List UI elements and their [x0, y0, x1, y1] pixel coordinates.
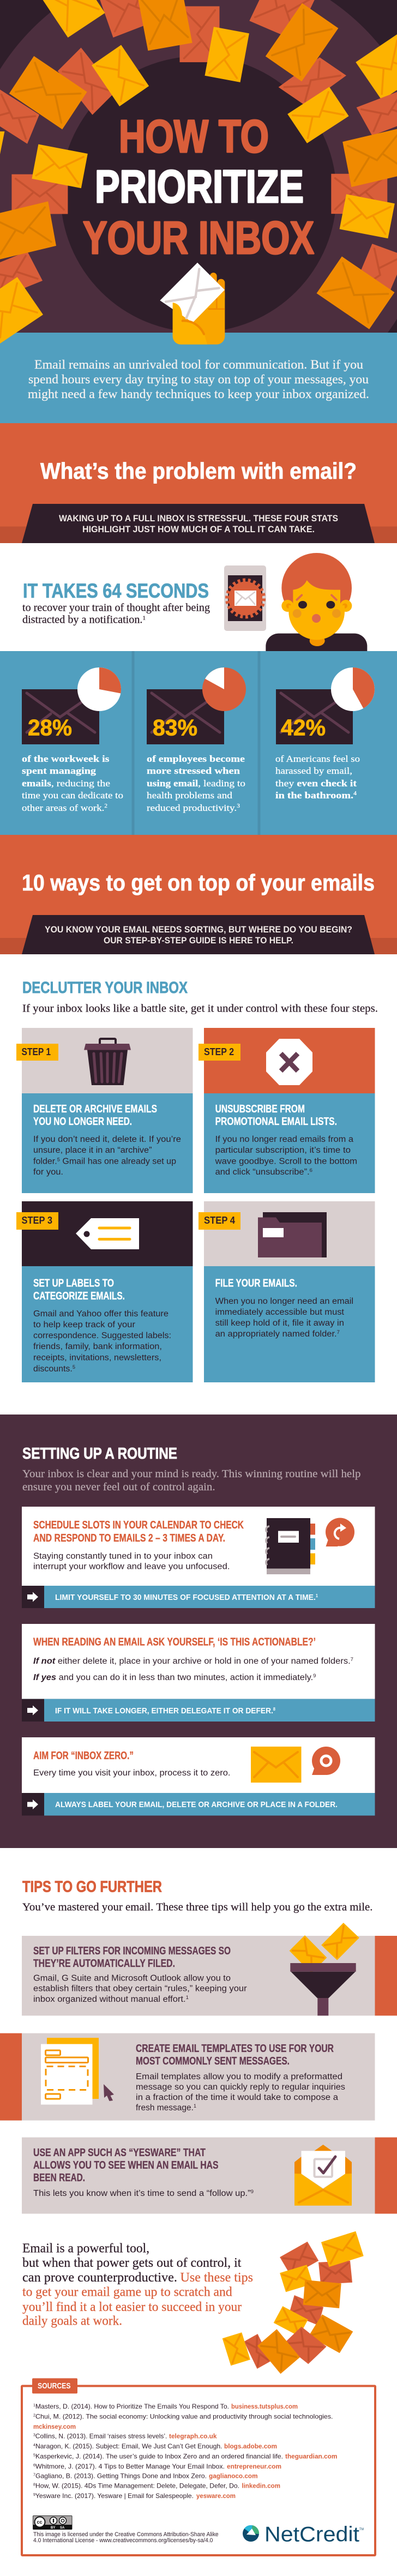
- card: step 3: friends, family, bank information,: [33, 1342, 162, 1351]
- routine card: is this actionable: If yes and you can do it in less than two minutes, action it immediately.: [33, 1673, 298, 1682]
- callout banner: YOU KNOW YOUR EMAIL NEEDS SORTING, BUT WHERE DO YOU BEGIN?: [45, 924, 352, 935]
- source list: Naragon, K. (2015). Subject: Email, We Just Can’t Get Enough.: [35, 2442, 222, 2450]
- icon: creative commons badge: SA: [60, 2526, 65, 2530]
- title: HOW TO: [119, 111, 269, 162]
- source list: blogs.adobe.com: [224, 2442, 277, 2450]
- stat: 28%: spent managing: [22, 766, 97, 776]
- icon: stop octagon: [266, 1039, 312, 1085]
- card: step 2: [198, 1028, 375, 1193]
- heading: What’s the problem with email?: [40, 458, 357, 484]
- license text: 4.0 International License - www.creativecommons.org/licenses/by-sa/4.0: [33, 2537, 213, 2544]
- closing text: can prove counterproductive.: [22, 2271, 177, 2285]
- stat: 28%: of the workweek is: [22, 754, 110, 764]
- source list: entrepreneur.com: [227, 2463, 281, 2470]
- panel: intro: spend hours every day trying to stay on top of your messages, you: [28, 372, 369, 386]
- card: step 3: receipts, invitations, newsletters,: [33, 1353, 161, 1362]
- icon: creative commons badge: BY: [51, 2526, 55, 2530]
- tip bar: ALWAYS LABEL YOUR EMAIL, DELETE OR ARCHIVE OR PLACE IN A FOLDER.: [55, 1800, 338, 1809]
- card: step 2: particular subscription, it’s time to: [215, 1146, 351, 1155]
- callout banner: HIGHLIGHT JUST HOW MUCH OF A TOLL IT CAN TAKE.: [82, 524, 315, 534]
- tip card: yesware: BEEN READ.: [33, 2172, 85, 2184]
- source list: 5: [33, 2454, 35, 2457]
- card: step 4: still keep hold of it, file it away in: [215, 1319, 344, 1328]
- routine card: is this actionable: WHEN READING AN EMAIL ASK YOURSELF, ‘IS THIS ACTIONABLE?’: [33, 1636, 316, 1648]
- stat: 28%: emails , reducing the: [22, 778, 110, 789]
- tip card: yesware: USE AN APP SUCH AS “YESWARE” THAT: [33, 2147, 206, 2159]
- routine card: inbox zero: [22, 1737, 375, 1816]
- panel: 64 seconds stat: [22, 553, 367, 651]
- stat: 28%: time you can dedicate to: [22, 790, 123, 801]
- closing text: daily goals at work.: [22, 2314, 122, 2328]
- card: step 3: to help keep track of your: [33, 1320, 135, 1329]
- tip card: yesware: ALLOWS YOU TO SEE WHEN AN EMAIL HAS: [33, 2159, 219, 2171]
- source list: How, W. (2015). 4Ds Time Management: Delete, Delegate, Defer, Do.: [35, 2482, 239, 2490]
- icon: notebook: [266, 1518, 315, 1574]
- icon: hand holding envelope: [160, 263, 225, 345]
- panel: problem heading: [0, 423, 397, 543]
- source list: [33, 2403, 337, 2500]
- source list: telegraph.co.uk: [169, 2433, 217, 2440]
- tip card: templates: [0, 2033, 375, 2121]
- source list: mckinsey.com: [33, 2423, 76, 2430]
- icon: trash can: [84, 1039, 131, 1085]
- text block: You’ve mastered your email. These three tips will help you go the extra mile.: [22, 1901, 372, 1913]
- tip card: filters: [22, 1923, 397, 2015]
- callout banner: WAKING UP TO A FULL INBOX IS STRESSFUL. THESE FOUR STATS: [59, 513, 338, 523]
- source list: 3: [33, 2434, 35, 2437]
- stat: 42%: harassed by email,: [275, 766, 352, 776]
- source list: Collins, N. (2013). Email ‘raises stress levels’.: [35, 2433, 167, 2440]
- source list: Whitmore, J. (2017). 4 Tips to Better Manage Your Email Inbox.: [35, 2463, 225, 2470]
- stat: 28%: [22, 667, 123, 813]
- step tag: [16, 1212, 58, 1230]
- source list: 6: [33, 2464, 35, 2467]
- icon: label tag: [76, 1218, 139, 1249]
- heading: SETTING UP A ROUTINE: [22, 1445, 177, 1462]
- logo: NetCredit: TM: [359, 2528, 364, 2531]
- tip card: filters: SET UP FILTERS FOR INCOMING MESSAGES SO: [33, 1945, 231, 1957]
- routine card: is this actionable: [22, 1624, 375, 1722]
- icon: creative commons badge: cc: [37, 2519, 43, 2525]
- stat: 28%: other areas of work.: [22, 803, 96, 813]
- logo: NetCredit: NetCredit: [264, 2523, 359, 2547]
- step tag: STEP 4: [204, 1215, 235, 1226]
- card: step 3: CATEGORIZE EMAILS.: [33, 1290, 125, 1302]
- routine card: schedule slots: AND RESPOND TO EMAILS 2 – 3 TIMES A DAY.: [33, 1532, 225, 1544]
- card: step 3: SET UP LABELS TO: [33, 1277, 114, 1289]
- tip card: filters: Gmail, G Suite and Microsoft Outlook allow you to: [33, 1974, 231, 1983]
- tip card: filters: establish filters that obey certain “rules,” keeping your: [33, 1984, 247, 1994]
- tip card: templates: fresh message.: [136, 2103, 194, 2112]
- panel: three stats: [0, 651, 397, 835]
- text block: distracted by a notification.: [22, 614, 142, 626]
- heading: IT TAKES 64 SECONDS: [23, 580, 209, 602]
- routine card: schedule slots: SCHEDULE SLOTS IN YOUR CALENDAR TO CHECK: [33, 1519, 244, 1531]
- card: step 1: for you.: [33, 1167, 63, 1177]
- routine card: is this actionable: 7: [351, 1657, 353, 1662]
- source list: gaglianoco.com: [209, 2472, 258, 2480]
- closing text: you’ll find it a lot easier to succeed in your: [22, 2300, 242, 2314]
- card: step 2: and click “unsubscribe”.: [215, 1167, 304, 1177]
- routine card: inbox zero: AIM FOR “INBOX ZERO.”: [33, 1750, 134, 1762]
- card: step 2: If you no longer read emails from a: [215, 1135, 353, 1144]
- card: step 2: wave goodbye. Scroll to the bottom: [215, 1157, 357, 1166]
- tip card: yesware: 9: [251, 2189, 254, 2194]
- source list: 7: [33, 2473, 35, 2477]
- sources tag: SOURCES: [38, 2381, 71, 2391]
- text block: [22, 602, 210, 626]
- source list: Gagliano, B. (2013). Getting Things Done and Inbox Zero.: [35, 2472, 207, 2480]
- text block: 1: [142, 615, 146, 622]
- card: step 4: immediately accessible but must: [215, 1308, 345, 1317]
- source list: 1: [33, 2404, 35, 2408]
- panel: intro: Email remains an unrivaled tool for communication. But if you: [34, 358, 364, 371]
- source list: 2: [33, 2414, 35, 2418]
- step tag: STEP 1: [22, 1046, 51, 1057]
- text block: If your inbox looks like a battle site, get it under control with these four steps.: [22, 1002, 378, 1014]
- card: step 1: Gmail has one already set up: [60, 1157, 176, 1166]
- tip card: filters: 1: [186, 1995, 189, 2000]
- icon: phone notification: [224, 565, 266, 631]
- stat: 42%: in the bathroom.: [275, 790, 341, 801]
- tip card: templates: CREATE EMAIL TEMPLATES TO USE FOR YOUR: [136, 2043, 334, 2055]
- stat: 42%: of Americans feel so: [275, 754, 360, 764]
- card: step 4: When you no longer need an email: [215, 1297, 353, 1306]
- stat: 42%: [275, 667, 375, 801]
- title: [83, 111, 314, 263]
- stat: 42%: 4: [353, 791, 357, 797]
- step tag: [198, 1044, 240, 1061]
- tip card: templates: in a fraction of the time it would take to compose a: [136, 2093, 338, 2102]
- tip bar: [22, 1586, 375, 1608]
- panel: declutter your inbox: [16, 979, 378, 1382]
- tip bar: [22, 1699, 375, 1722]
- routine card: is this actionable: If not either delete it, place in your archive or hold in one of your named folders.: [33, 1657, 333, 1666]
- step tag: STEP 3: [22, 1215, 52, 1226]
- sources tag: [32, 2378, 77, 2393]
- heading: TIPS TO GO FURTHER: [22, 1879, 162, 1896]
- icon: folder: [258, 1212, 327, 1257]
- card: step 3: 5: [73, 1364, 75, 1370]
- card: step 1: unsure, place it in an “archive”: [33, 1146, 152, 1155]
- card: step 4: [198, 1201, 375, 1382]
- icon: envelope pile: [222, 2231, 364, 2374]
- source list: Yesware Inc. (2017). Yesware | Email for Salespeople.: [35, 2492, 194, 2500]
- card: step 4: FILE YOUR EMAILS.: [215, 1277, 297, 1289]
- tip bar: [22, 1793, 375, 1816]
- stat: 28%: 28%: [28, 714, 72, 741]
- source list: 9: [33, 2493, 35, 2497]
- tip card: yesware: [22, 2138, 397, 2214]
- icon: worried person: [266, 553, 367, 651]
- source list: business.tutsplus.com: [231, 2403, 298, 2410]
- step tag: [198, 1212, 240, 1230]
- closing text: to get your email game up to scratch and: [22, 2285, 232, 2300]
- callout banner: [22, 915, 375, 954]
- text block: [22, 1468, 361, 1493]
- tip card: yesware: This lets you know when it’s time to send a “follow up.”: [33, 2189, 237, 2198]
- panel: intro: might need a few handy techniques to keep your inbox organized.: [28, 387, 369, 401]
- card: step 4: 7: [337, 1329, 340, 1335]
- stat: 83%: more stressed when: [147, 766, 240, 776]
- panel: tips to go further: [0, 1879, 397, 2214]
- source list: linkedin.com: [242, 2482, 280, 2490]
- source list: Masters, D. (2014). How to Prioritize The Emails You Respond To.: [35, 2403, 229, 2410]
- icon: template document: [41, 2038, 114, 2105]
- card: step 1: If you don’t need it, delete it. If you’re: [33, 1135, 181, 1144]
- source list: 8: [33, 2483, 35, 2487]
- icon: envelope: [251, 1747, 301, 1783]
- tip bar: 1: [316, 1593, 318, 1598]
- stat: 83%: using email , leading to: [147, 778, 245, 789]
- step tag: STEP 2: [204, 1046, 234, 1057]
- card: step 1: 5: [57, 1157, 60, 1163]
- card: step 1: YOU NO LONGER NEED.: [33, 1116, 132, 1128]
- card: step 2: 6: [310, 1167, 312, 1173]
- license text: [33, 2531, 219, 2544]
- hero banner: [0, 0, 397, 349]
- closing text: Email is a powerful tool,: [22, 2241, 149, 2255]
- icon: speech bubble zero: [312, 1747, 340, 1775]
- closing text: but when that power gets out of control, it: [22, 2256, 242, 2270]
- card: step 3: correspondence. Suggested labels:: [33, 1331, 171, 1340]
- card: step 3: [16, 1201, 193, 1382]
- card: step 1: folder.: [33, 1157, 56, 1166]
- tip bar: LIMIT YOURSELF TO 30 MINUTES OF FOCUSED ATTENTION AT A TIME.: [55, 1593, 335, 1602]
- title: PRIORITIZE: [95, 161, 304, 212]
- routine card: schedule slots: Staying constantly tuned in to your inbox can: [33, 1552, 213, 1561]
- icon: creative commons badge: [33, 2516, 72, 2530]
- card: step 1: DELETE OR ARCHIVE EMAILS: [33, 1103, 157, 1115]
- panel: setting up a routine: [0, 1415, 397, 1848]
- panel: 10 ways heading: [0, 835, 397, 954]
- tip card: templates: MOST COMMONLY SENT MESSAGES.: [136, 2055, 290, 2067]
- icon: opened envelope with check: [294, 2145, 352, 2206]
- closing text: [22, 2241, 253, 2328]
- icon: funnel with envelopes: [290, 1923, 359, 2015]
- callout banner: OUR STEP-BY-STEP GUIDE IS HERE TO HELP.: [104, 935, 293, 946]
- source list: yesware.com: [196, 2492, 236, 2500]
- card: step 2: UNSUBSCRIBE FROM: [215, 1103, 305, 1115]
- routine card: inbox zero: Every time you visit your inbox, process it to zero.: [33, 1768, 230, 1778]
- card: step 1: [16, 1028, 193, 1193]
- tip card: templates: 1: [194, 2103, 196, 2109]
- routine card: schedule slots: interrupt your workflow and leave you unfocused.: [33, 1562, 230, 1572]
- stat: 83%: of employees become: [147, 754, 245, 764]
- source list: Chui, M. (2012). The social economy: Unlocking value and productivity through social technologies.: [35, 2413, 333, 2421]
- tip bar: IF IT WILL TAKE LONGER, EITHER DELEGATE IT OR DEFER.: [55, 1706, 292, 1716]
- license text: This image is licensed under the Creative Commons Attribution-Share Alike: [33, 2531, 219, 2538]
- text block: ensure you never feel out of control again.: [22, 1481, 215, 1493]
- card: step 4: an appropriately named folder.: [215, 1329, 329, 1339]
- card: step 2: PROMOTIONAL EMAIL LISTS.: [215, 1116, 337, 1128]
- text block: to recover your train of thought after being: [22, 602, 210, 614]
- stat: 83%: 83%: [153, 714, 197, 741]
- tip bar: 8: [273, 1707, 276, 1712]
- stat: 83%: health problems and: [147, 790, 233, 801]
- stat: 28%: 2: [104, 803, 107, 809]
- title: YOUR INBOX: [83, 212, 314, 263]
- tip card: templates: Email templates allow you to modify a preformatted: [136, 2072, 342, 2081]
- panel: intro: [0, 333, 397, 423]
- stat: 83%: [147, 667, 246, 813]
- source list: theguardian.com: [285, 2453, 337, 2460]
- stat: 83%: reduced productivity.: [147, 803, 225, 813]
- stat: 42%: 42%: [281, 714, 326, 741]
- panel: sources: [22, 2378, 375, 2555]
- routine card: is this actionable: 9: [313, 1673, 316, 1678]
- step tag: [16, 1044, 58, 1061]
- stat: 42%: they even check it: [275, 778, 357, 789]
- flying envelopes: [0, 0, 397, 344]
- card: step 3: discounts.: [33, 1364, 71, 1374]
- icon: speech bubble with arrow: [326, 1518, 354, 1546]
- tip card: templates: message so you can quickly reply to regular inquiries: [136, 2083, 345, 2092]
- card: step 3: Gmail and Yahoo offer this feature: [33, 1309, 169, 1319]
- closing text: Use these tips: [180, 2271, 253, 2285]
- routine card: schedule slots: [22, 1507, 375, 1608]
- source list: Kasperkevic, J. (2014). The user’s guide to Inbox Zero and an ordered financial life.: [35, 2453, 283, 2460]
- callout banner: [22, 504, 375, 543]
- text block: Your inbox is clear and your mind is ready. This winning routine will help: [22, 1468, 361, 1480]
- stat: 83%: 3: [237, 803, 240, 809]
- source list: 4: [33, 2443, 35, 2447]
- tip card: filters: THEY’RE AUTOMATICALLY FILED.: [33, 1958, 175, 1970]
- heading: DECLUTTER YOUR INBOX: [22, 979, 188, 997]
- tip card: filters: inbox organized without manual effort.: [33, 1995, 176, 2004]
